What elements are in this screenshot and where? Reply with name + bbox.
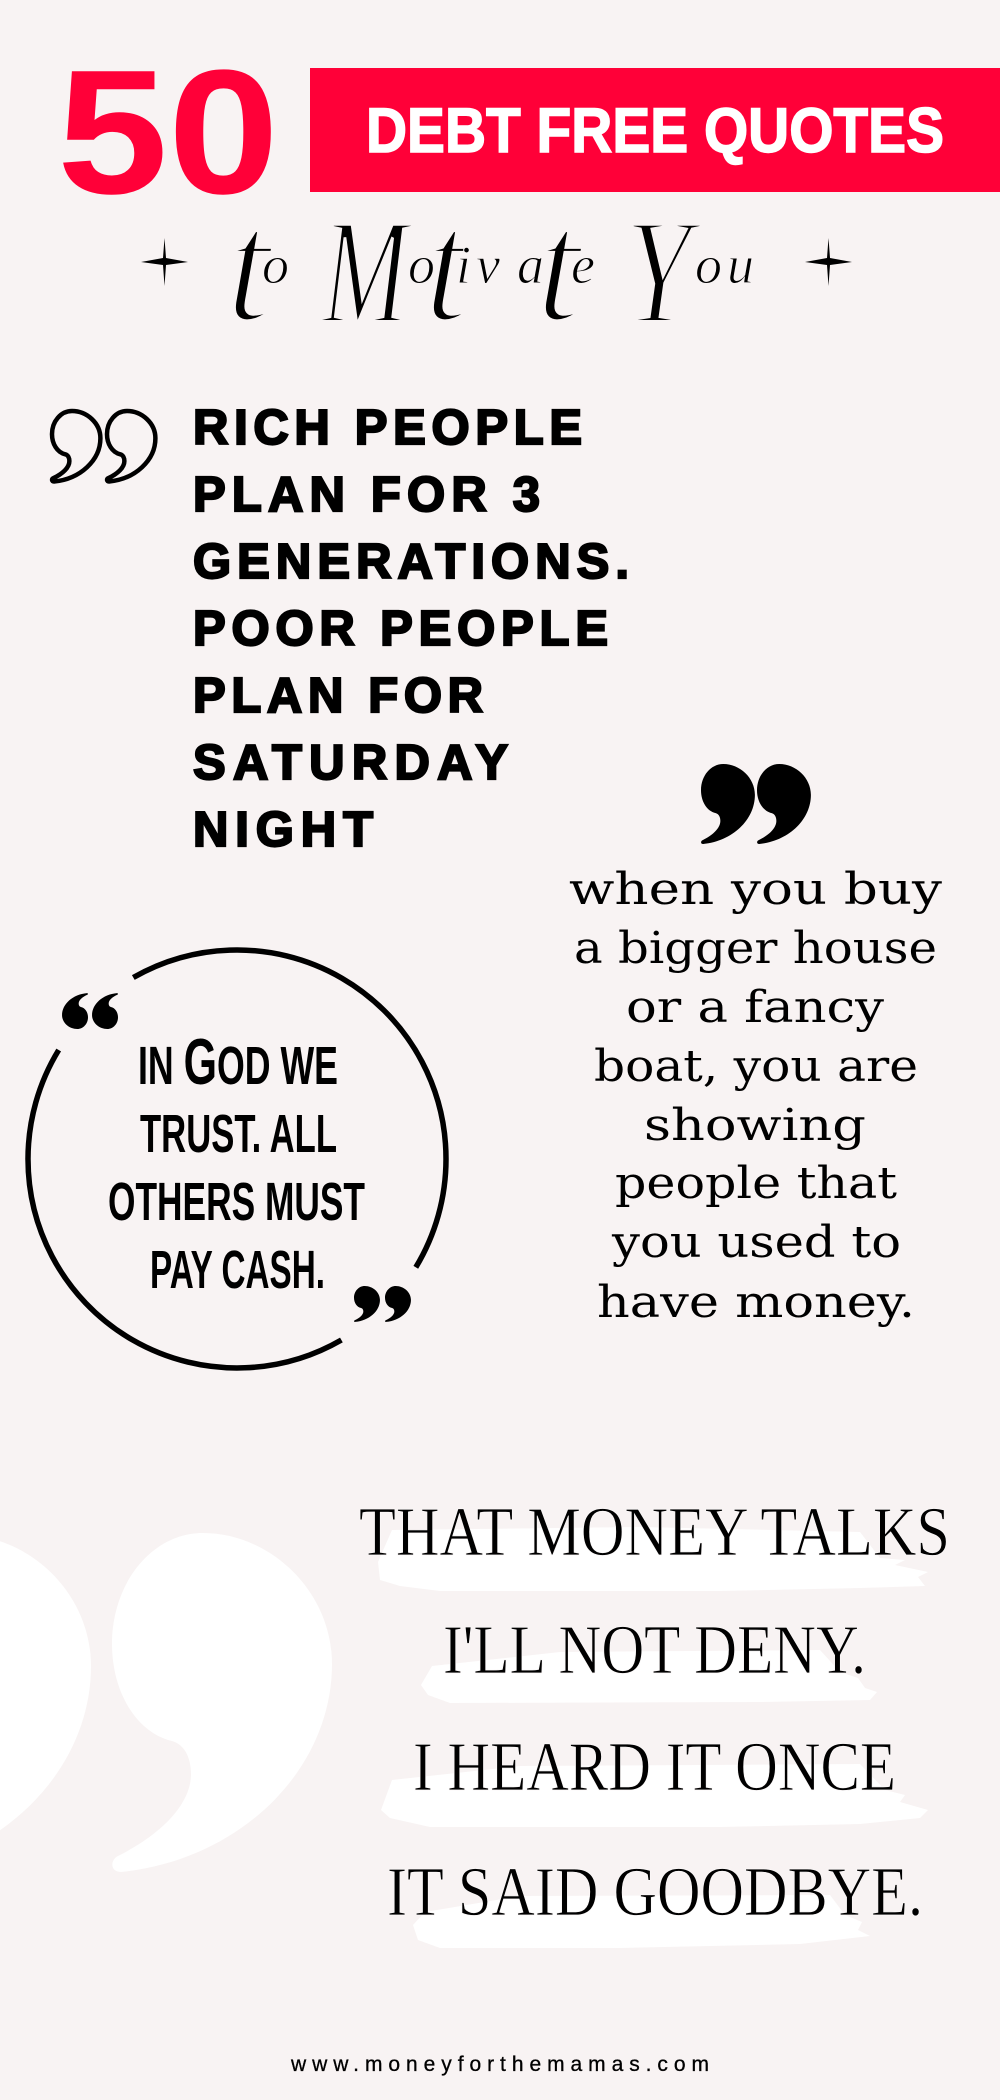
red banner [310, 68, 1000, 192]
banner title: DEBT FREE QUOTES [366, 96, 944, 166]
quote: in god we trust: IN GOD WE [138, 1025, 338, 1098]
subtitle: to Motivate You [226, 177, 754, 355]
broken circle frame [28, 950, 446, 1368]
quote: rich people: SATURDAY [193, 736, 508, 790]
quote: bigger house: boat, you are [594, 1041, 918, 1092]
icon: right sparkle [805, 238, 852, 286]
quote: money talks: I HEARD IT ONCE [413, 1729, 896, 1806]
subtitle: to Motivate You: Y [625, 189, 702, 355]
quote: rich people: POOR PEOPLE [193, 602, 608, 656]
quote: bigger house: or a fancy [626, 982, 884, 1033]
quote: in god we trust: TRUST. ALL [140, 1104, 337, 1164]
quote: rich people: GENERATIONS. [193, 535, 629, 589]
subtitle: to Motivate You: o [695, 235, 722, 295]
quote: money talks [359, 1494, 950, 1931]
header: 50 debt free quotes [57, 33, 1000, 231]
subtitle: to Motivate You: a [517, 235, 544, 295]
quote: rich people: NIGHT [193, 803, 373, 857]
icon: left sparkle [141, 238, 188, 286]
subtitle: to Motivate You: M [321, 189, 413, 355]
quote: money talks: I'LL NOT DENY. [443, 1612, 866, 1689]
quote: bigger house [569, 864, 942, 1328]
footer url: www.moneyforthemamas.com [290, 2053, 709, 2076]
subtitle: to Motivate You: v [476, 235, 500, 295]
white brush strokes [378, 1527, 928, 1948]
quote: bigger house: have money. [597, 1277, 915, 1328]
icon: opening quote [62, 993, 118, 1029]
subtitle: to Motivate You: i [456, 235, 471, 295]
quote: money talks: IT SAID GOODBYE. [387, 1854, 923, 1931]
icon: solid quote mark [701, 764, 811, 844]
quote: rich people [193, 401, 629, 857]
subtitle: to Motivate You: u [727, 235, 754, 295]
subtitle: to Motivate You: e [571, 235, 608, 295]
icon: outlined quote mark [52, 411, 155, 482]
quote: bigger house: showing [644, 1100, 866, 1151]
quote: in god we trust [108, 1025, 365, 1300]
subtitle: to Motivate You: o [408, 235, 435, 295]
panel: circled quote [28, 950, 446, 1368]
subtitle: to Motivate You: t [424, 177, 472, 355]
icon: closing quote [354, 1286, 411, 1322]
quote: rich people: RICH PEOPLE [193, 401, 582, 455]
quote: bigger house: you used to [611, 1217, 901, 1268]
quote: in god we trust: PAY CASH. [150, 1240, 325, 1300]
quote: rich people: PLAN FOR [193, 669, 483, 723]
quote: bigger house: when you buy [569, 864, 942, 915]
subtitle: to Motivate You: o [262, 235, 302, 295]
quote: bigger house: people that [615, 1158, 897, 1209]
icon: large white quote mark [0, 1533, 332, 1874]
number 50: 50 [57, 33, 279, 231]
quote: bigger house: a bigger house [574, 923, 937, 974]
quote: rich people: PLAN FOR 3 [193, 468, 540, 522]
subtitle: to Motivate You: t [226, 177, 274, 355]
quote: in god we trust: OTHERS MUST [108, 1172, 365, 1232]
subtitle: to Motivate You: t [536, 177, 584, 355]
